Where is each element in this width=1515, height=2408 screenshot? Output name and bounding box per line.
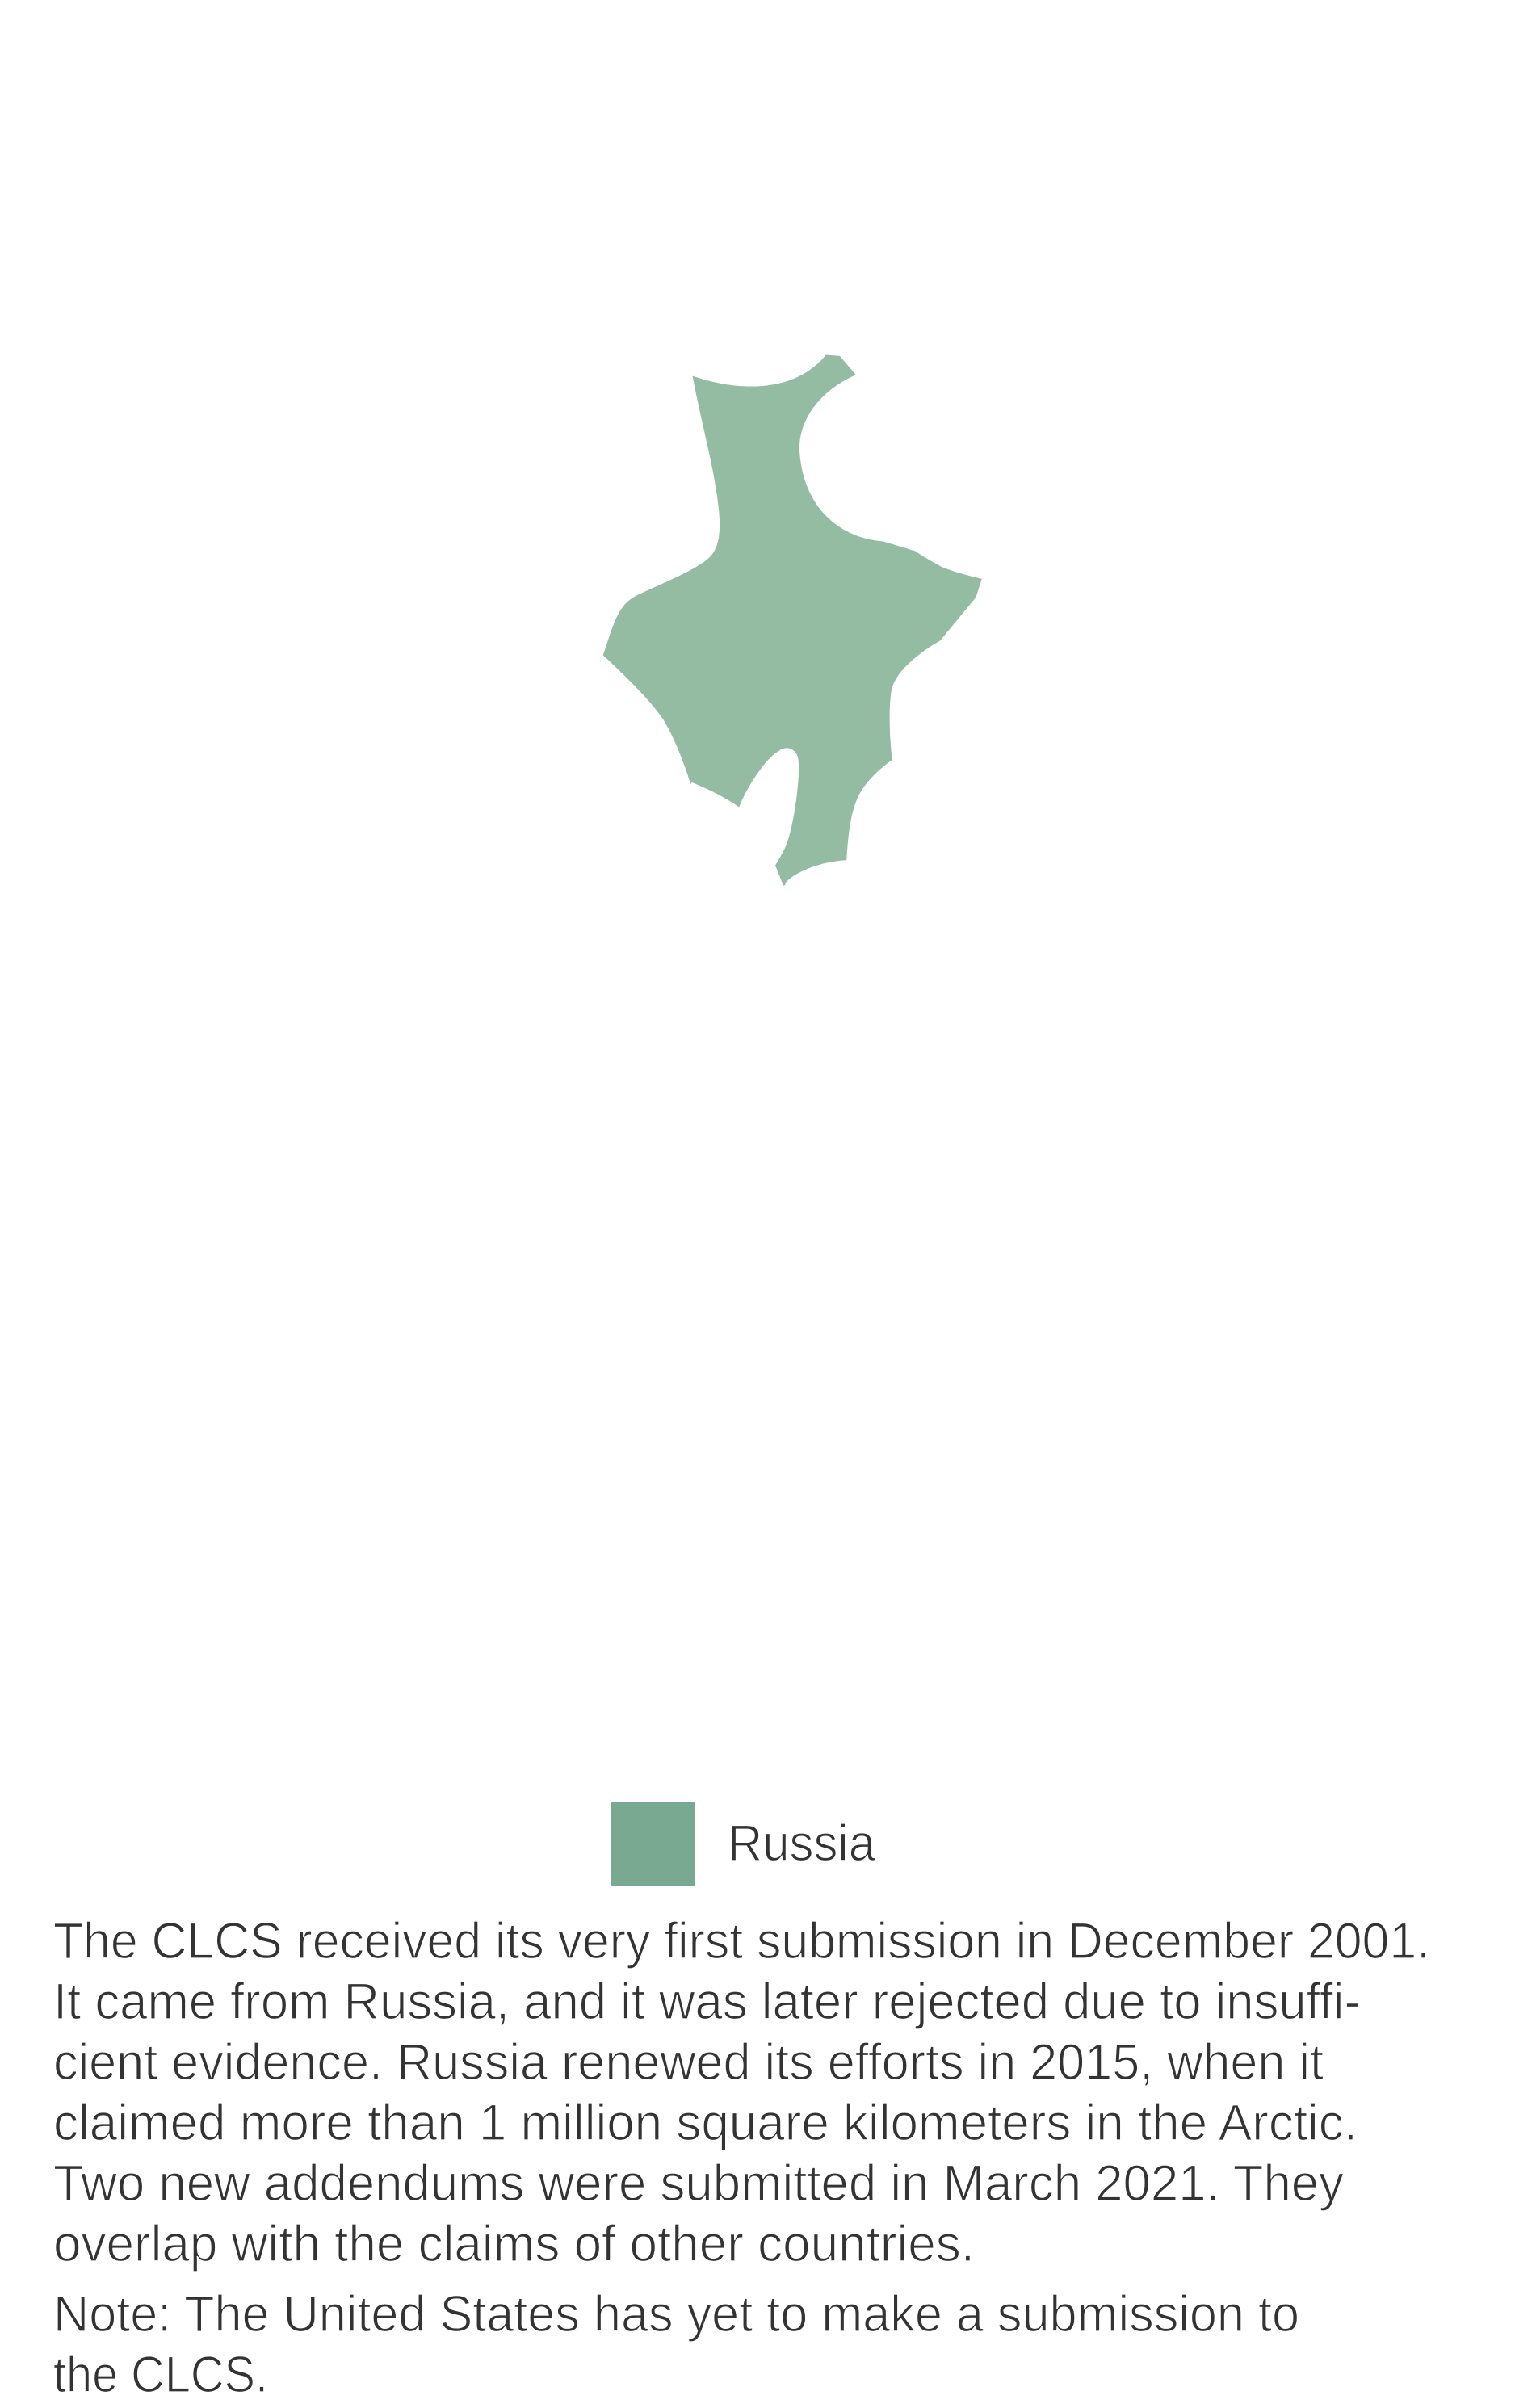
legend swatch: Russia [611, 1802, 695, 1886]
text block: note: the CLCS. [53, 2347, 268, 2403]
text block: description: Two new addendums were submitted in March 2021. They [53, 2155, 1344, 2212]
text block: description: overlap with the claims of other countries. [53, 2216, 975, 2272]
text block: description [53, 1913, 1430, 2272]
legend [611, 1802, 876, 1886]
map: Russia claim area [603, 354, 982, 886]
text block: note: Note: The United States has yet to make a submission to [53, 2286, 1299, 2343]
text block: description: It came from Russia, and it was later rejected due to insuffi- [53, 1974, 1361, 2030]
text block: description: The CLCS received its very first submission in December 2001. [53, 1913, 1430, 1970]
text block: description: cient evidence. Russia renewed its efforts in 2015, when it [53, 2034, 1324, 2091]
text block: note [53, 2286, 1299, 2403]
text block: description: claimed more than 1 million square kilometers in the Arctic. [53, 2095, 1358, 2151]
legend label: Russia: Russia [728, 1815, 876, 1872]
